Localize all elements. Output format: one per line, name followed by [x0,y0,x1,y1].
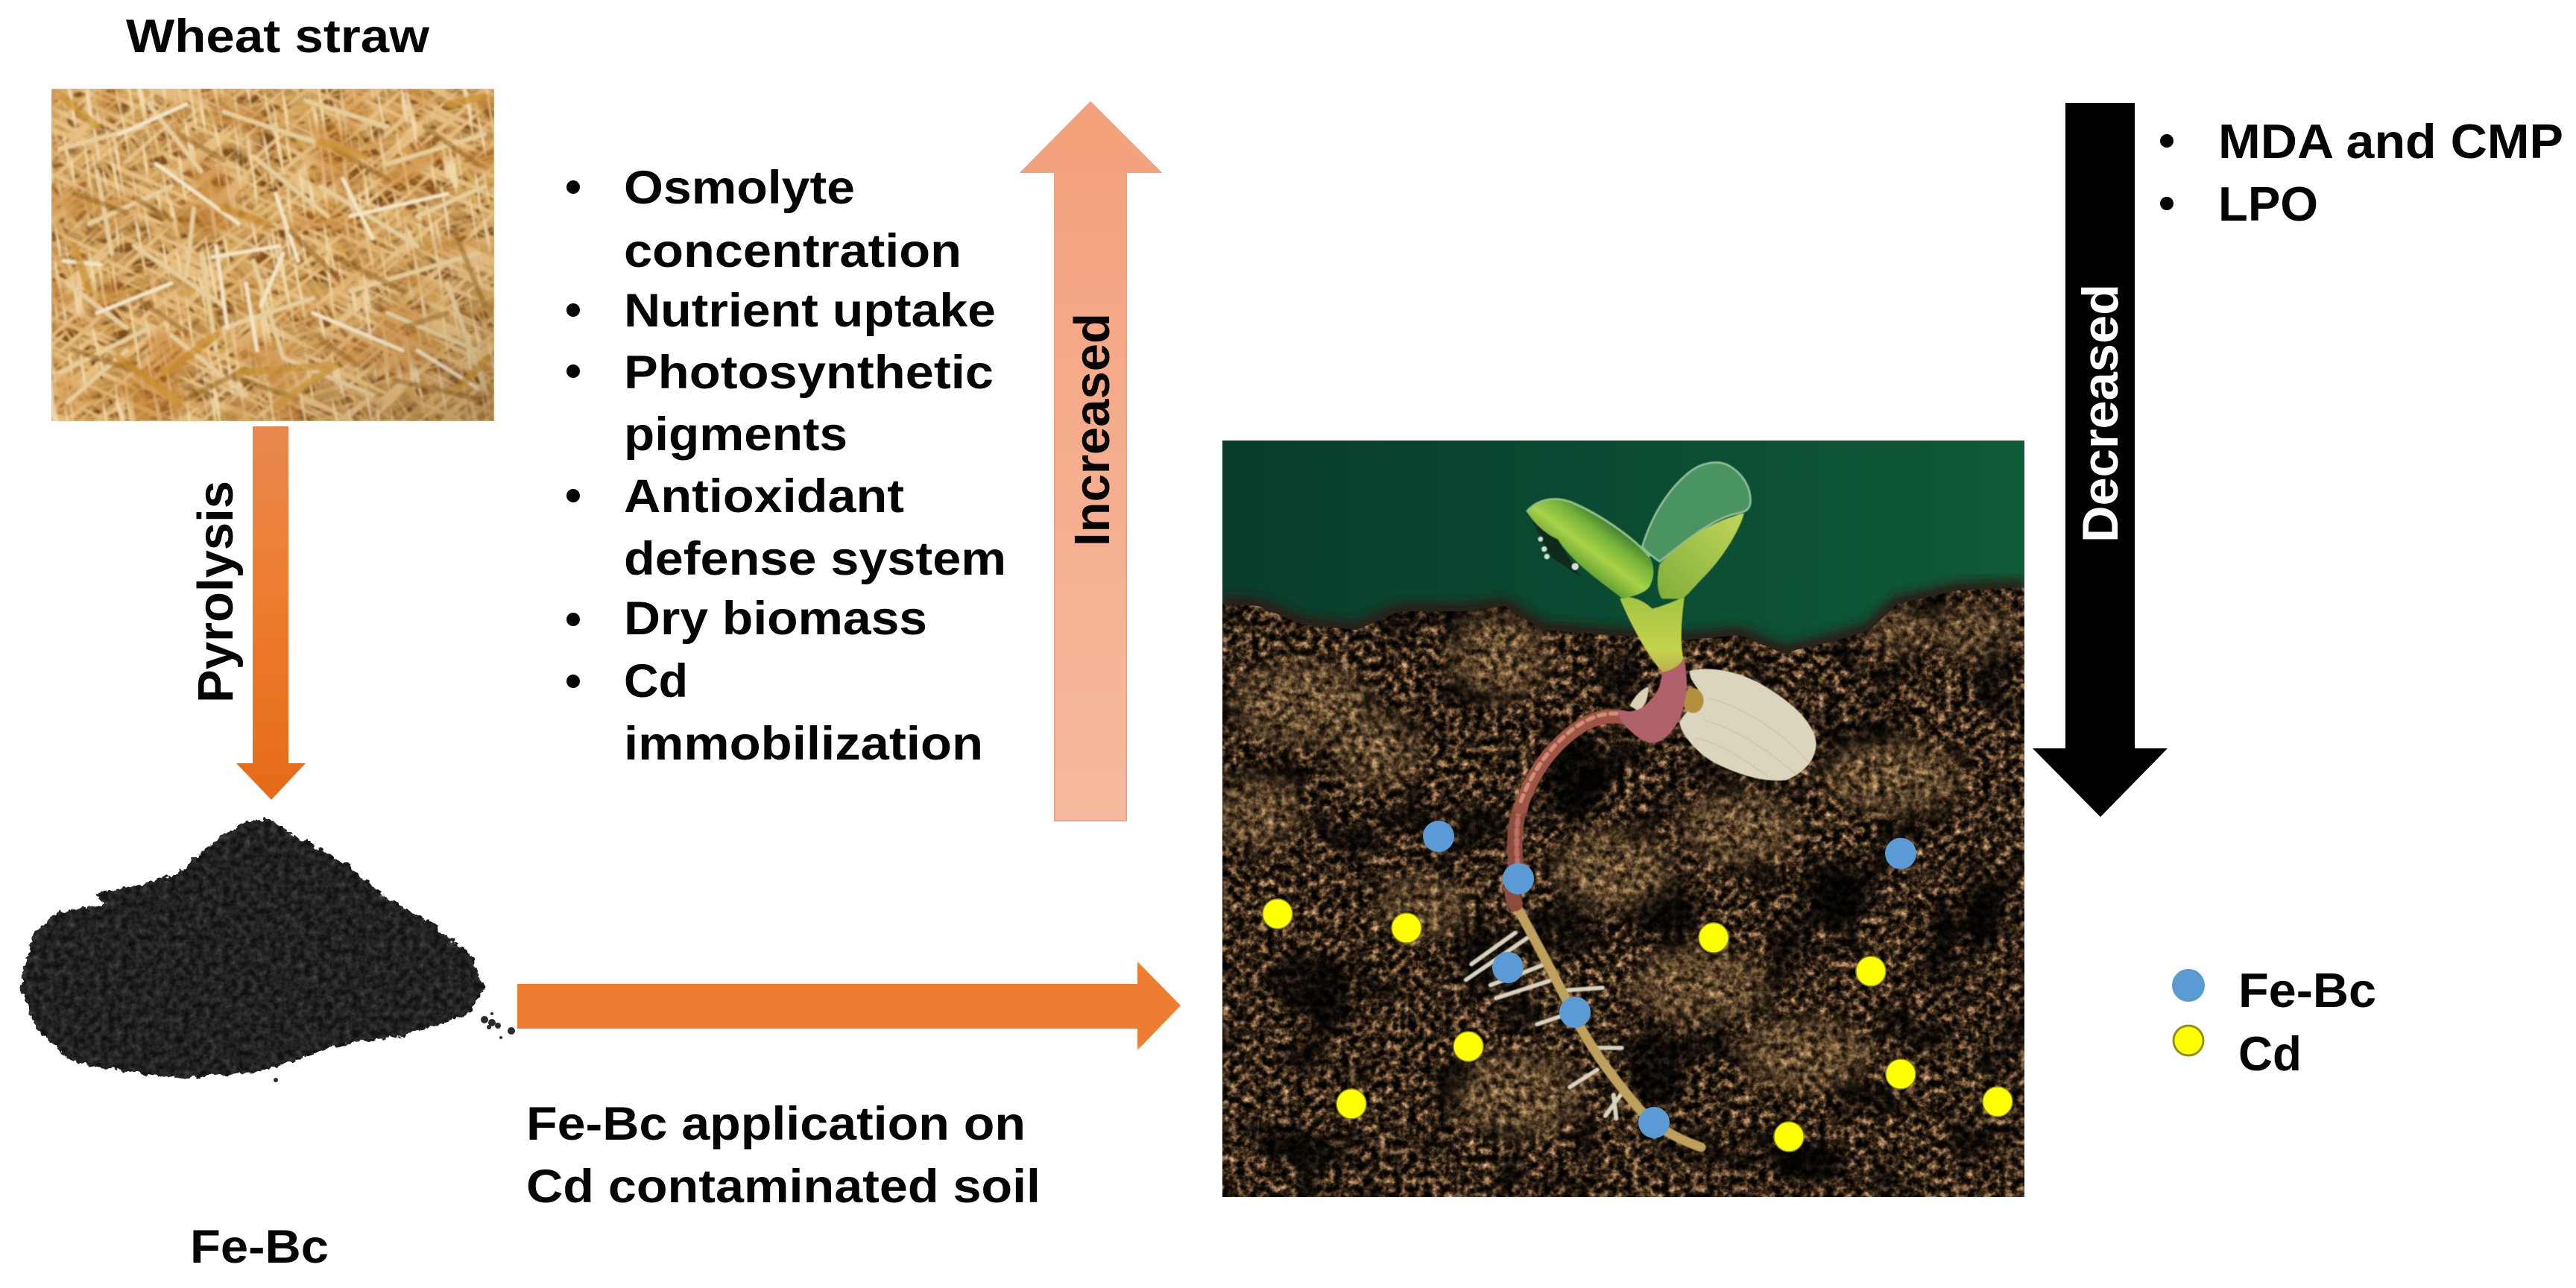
list: increased effects: pigments [624,408,847,461]
legend: Fe-Bc: Fe-Bc [2238,963,2376,1017]
label: Increased: Increased [1064,313,1120,546]
text: Fe-Bc application on Cd contaminated soil: Fe-Bc application on [526,1098,1026,1150]
photo: Fe-Bc biochar pile [20,818,515,1082]
list: decreased effects: MDA and CMP [2218,114,2563,168]
label: Pyrolysis: Pyrolysis [188,481,244,703]
text: Fe-Bc application on Cd contaminated soil: Cd contaminated soil [526,1161,1041,1213]
list: increased effects: defense system [624,533,1006,585]
soft horizon [1222,587,2024,653]
list: decreased effects: LPO [2218,177,2318,231]
heading: Wheat straw: Wheat straw [126,10,430,63]
arrow: application to soil [517,962,1181,1050]
list: increased effects: immobilization [624,718,983,770]
list: increased effects: Nutrient uptake [624,285,996,337]
upper root [1519,713,1640,807]
legend: Cd: Cd [2238,1026,2302,1081]
stem [1620,596,1685,672]
arrow: increased [1021,102,1161,821]
green backdrop [1222,441,2024,664]
text: Fe-Bc application on Cd contaminated soil [526,1098,1041,1213]
list: increased effects: Photosynthetic [624,347,994,399]
list: increased effects: Osmolyte [624,162,855,214]
right leaf, front [1658,513,1744,599]
photo: wheat straw [51,89,494,421]
list: decreased effects [2160,114,2563,231]
legend: Fe-Bc [2172,963,2376,1017]
seed husk [1679,669,1816,780]
particles: Cd [1263,899,2012,1152]
photo: seedling in soil [1222,441,2024,1197]
list: increased effects: concentration [624,225,962,277]
list: increased effects [566,162,1006,770]
list: increased effects: Dry biomass [624,593,927,645]
seed chip [1630,687,1649,710]
label: Decreased: Decreased [2072,284,2129,543]
seedling: lower root [1466,807,1701,1147]
arrow: pyrolysis [236,426,306,800]
legend [2172,963,2376,1081]
particles: Fe-Bc [1423,821,1916,1138]
hypocotyl [1617,656,1687,743]
list: increased effects: Antioxidant [624,470,904,523]
seedling: shoot and seed [1519,462,1816,807]
left leaf [1527,499,1653,599]
label: Fe-Bc: Fe-Bc [190,1221,329,1273]
left leaf underside and droplets [1533,522,1580,576]
list: increased effects: Cd [624,655,688,707]
legend: Cd [2174,1026,2302,1081]
lighter clods of soil [1222,595,2024,1146]
arrow: decreased [2033,103,2168,817]
soil [1222,581,2024,1197]
right leaf, back [1642,462,1750,561]
